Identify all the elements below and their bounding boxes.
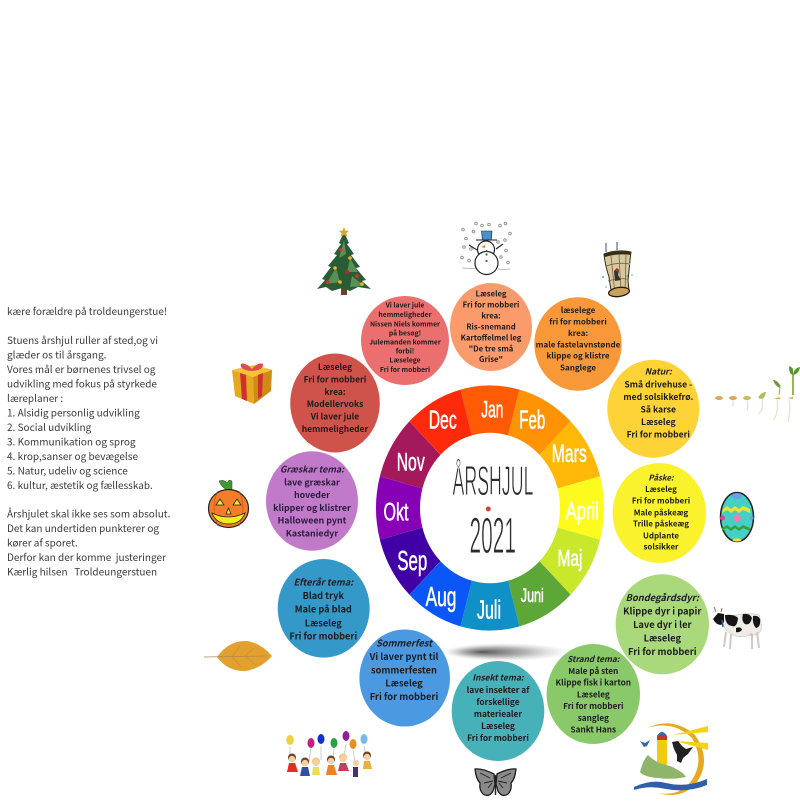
panel: January: Læseleg	[476, 289, 507, 300]
intro text block: Kærlig hilsen Troldeungerstuen	[7, 564, 157, 579]
panel: March: Natur:	[645, 366, 673, 378]
panel: March: Små drivehuse -	[624, 379, 692, 391]
panel: October: Græskar tema:	[280, 462, 345, 475]
panel: May	[616, 574, 709, 674]
wheel title: 2021	[470, 507, 516, 564]
month labels: Jan	[481, 396, 503, 424]
panel: June: Strand tema:	[567, 653, 621, 665]
panel: November: Modellervoks	[307, 398, 363, 410]
intro text block: 1. Alsidig personlig udvikling	[7, 404, 140, 419]
panel: July: Insekt tema:	[472, 672, 525, 684]
month labels: Okt	[384, 498, 409, 526]
panel: September: Male på blad	[295, 602, 352, 616]
panel: November	[290, 354, 380, 452]
text: ÅRSHJUL	[452, 457, 534, 504]
intro text block: Stuens årshjul ruller af sted,og vi	[7, 332, 158, 347]
panel: April: solsikker	[644, 542, 679, 553]
panel: February: krea:	[568, 328, 588, 339]
month labels: Sep	[397, 545, 427, 576]
panel: February	[534, 297, 622, 391]
panel: January: krea:	[481, 311, 501, 322]
panel: August: Vi laver pynt til	[369, 649, 438, 663]
icon: pumpkin	[208, 480, 248, 528]
panel: March: Fri for mobberi	[627, 429, 690, 441]
panel: August: Læseleg	[385, 676, 423, 690]
panel: August: Fri for mobberi	[370, 689, 438, 703]
panel: January: Ris-snemand	[466, 321, 516, 332]
panel: May: Klippe dyr i papir	[623, 604, 702, 618]
intro text block: Det kan undertiden punkterer og	[7, 520, 159, 535]
month labels: April	[566, 498, 599, 526]
panel: August	[359, 630, 450, 726]
panel: December	[361, 296, 449, 385]
intro text block: udvikling med fokus på styrkede	[7, 375, 157, 390]
panel: July: Læseleg	[481, 720, 515, 732]
panel: February: læselege	[561, 305, 596, 316]
intro text block: 4. krop,sanser og bevægelse	[7, 448, 138, 463]
panel: July	[452, 661, 544, 761]
panel: March: med solsikkefrø.	[623, 391, 693, 403]
panel: July: forskellige	[476, 696, 520, 708]
panel: May: Fri for mobberi	[628, 644, 697, 658]
month labels: Juli	[477, 594, 501, 624]
month labels: Juni	[521, 586, 544, 607]
panel: February: fri for mobberi	[549, 317, 607, 328]
month labels: Dec	[429, 404, 457, 434]
panel: September: Blad tryk	[303, 588, 344, 602]
panel: September: Læseleg	[305, 615, 342, 629]
panel: October: Halloween pynt	[278, 514, 347, 527]
month labels: Feb	[519, 404, 545, 434]
month labels: Nov	[397, 448, 425, 476]
icon: snowman	[461, 222, 511, 274]
panel: October: hoveder	[294, 488, 330, 501]
panel: December: hemmeligheder	[378, 309, 432, 319]
panel: April: Male påskeæg	[634, 507, 689, 518]
panel: November: krea:	[324, 386, 346, 398]
intro text block: kører af sporet.	[7, 535, 78, 550]
panel: May: Bondegårdsdyr:	[626, 590, 700, 604]
panel: April: Påske:	[648, 473, 675, 484]
icon: easter egg	[720, 492, 754, 542]
panel: November: Fri for mobberi	[304, 374, 367, 386]
month labels	[384, 396, 599, 624]
intro text block: glæder os til årsgang.	[7, 346, 107, 362]
intro text block: kære forældre på troldeungerstue!	[7, 303, 167, 318]
icon: lighthouse logo	[634, 723, 708, 795]
panel: December: Fri for mobberi	[380, 364, 430, 374]
panel: December: Julemanden kommer	[369, 337, 441, 347]
panel: January: "De tre små	[469, 343, 513, 354]
panel: May: Lave dyr i ler	[633, 617, 692, 631]
intro text block: Vores mål er børnenes trivsel og	[7, 361, 156, 376]
panel: January: Grise"	[479, 354, 503, 365]
panel: November: Vi laver jule	[310, 410, 359, 422]
wheel title	[452, 457, 534, 564]
panel: June: Klippe fisk i karton	[556, 676, 631, 688]
panel: March: Så karse	[641, 404, 676, 416]
intro text block: 5. Natur, udeliv og science	[7, 462, 128, 477]
intro text block: Årshjulet skal ikke ses som absolut.	[7, 506, 171, 521]
panel: June: Læseleg	[577, 688, 610, 700]
panel: September	[278, 559, 370, 658]
panel: April: Udplante	[643, 530, 679, 541]
panel: March: Læseleg	[641, 416, 676, 428]
panel: April: Trille påskeæg	[633, 519, 689, 530]
panel: October: Kastaniedyr	[286, 526, 338, 539]
panel: January: Kartoffelmel leg	[461, 332, 522, 343]
month labels: Mars	[552, 440, 587, 468]
intro text block: 2. Social udvikling	[7, 419, 92, 434]
icon: gift box	[232, 364, 273, 404]
panel: September: Efterår tema:	[293, 574, 354, 588]
icon: cow	[713, 607, 761, 649]
panel: January	[450, 283, 532, 371]
panel: February: klippe og klistre	[546, 351, 610, 362]
panel: August: sommerfesten	[371, 662, 437, 676]
panel: February: male fastelavnstønde	[536, 339, 621, 350]
panel: June: Male på sten	[568, 665, 618, 677]
year wheel	[376, 385, 604, 631]
panel: April: Læseleg	[645, 484, 677, 495]
panel: May: Læseleg	[644, 630, 681, 644]
panel: February: Sanglege	[560, 363, 596, 374]
intro text block: 6. kultur, æstetik og fællesskab.	[7, 477, 153, 492]
month labels: Maj	[558, 545, 582, 571]
panel: November: Læseleg	[318, 361, 352, 373]
panel: June: Sankt Hans	[571, 724, 616, 736]
panel: April	[613, 463, 706, 563]
intro text block: Derfor kan der komme justeringer	[7, 549, 166, 564]
panel: April: Fri for mobberi	[632, 496, 690, 507]
panel: December: Læselege	[389, 355, 421, 365]
panel: September: Fri for mobberi	[289, 628, 357, 642]
month labels: Aug	[426, 581, 456, 612]
panel: July: materiealer	[474, 708, 522, 720]
icon: autumn leaf	[204, 641, 272, 671]
icon: seedlings	[715, 366, 800, 422]
panel: August: Sommerfest	[376, 635, 433, 649]
icon: butterfly	[475, 769, 516, 795]
panel: October: klipper og klistrer	[273, 501, 351, 514]
panel: June: Fri for mobberi	[563, 700, 624, 712]
intro text block: 3. Kommunikation og sprog	[7, 433, 136, 448]
panel: November: hemmeligheder	[302, 423, 369, 435]
panel: June	[547, 644, 640, 744]
panel: October	[266, 451, 358, 551]
icon: carnival barrel	[602, 242, 633, 298]
panel: December: forbi!	[396, 346, 414, 356]
panel: June: sangleg	[578, 712, 609, 724]
intro text block: læreplaner :	[7, 390, 63, 405]
icon: children with balloons	[286, 731, 372, 777]
panel: July: lave insekter af	[467, 684, 530, 696]
panel: October: lave græskar	[284, 475, 340, 488]
panel: July: Fri for mobberi	[467, 732, 529, 744]
panel: January: Fri for mobberi	[463, 300, 519, 311]
icon: christmas tree	[317, 227, 371, 295]
panel: December: Vi laver jule	[385, 300, 424, 310]
panel: December: på besøg!	[389, 328, 421, 338]
panel: March	[607, 360, 699, 458]
shadow under wheel	[443, 643, 571, 661]
panel: December: Nissen Niels kommer	[370, 318, 440, 328]
